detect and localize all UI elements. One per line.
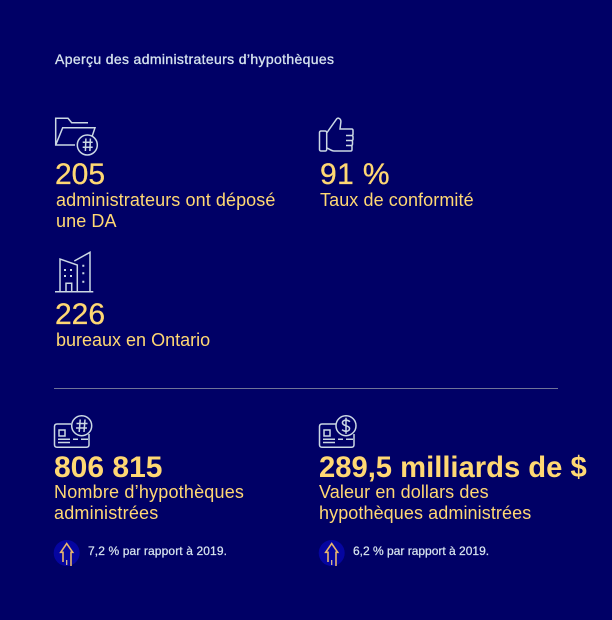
label: administrators: une DA bbox=[56, 211, 117, 231]
icon: thumbs up bbox=[318, 117, 354, 152]
label: dollar value bbox=[319, 482, 531, 523]
stat: 289,5 milliards de $: 289,5 milliards de $ bbox=[319, 452, 587, 484]
title: Aperçu des administrateurs d’hypothèques bbox=[55, 51, 334, 67]
label: dollar value: Valeur en dollars des bbox=[319, 482, 489, 502]
label: compliance: Taux de conformité bbox=[320, 190, 474, 210]
label: number of mortgages: Nombre d’hypothèques bbox=[54, 482, 244, 502]
label: administrators bbox=[56, 190, 275, 231]
label: dollar value: hypothèques administrées bbox=[319, 503, 531, 523]
label: number of mortgages bbox=[54, 482, 244, 523]
stat: 205: 205 bbox=[55, 158, 105, 191]
icon: card with hash bbox=[54, 415, 92, 448]
note: 6,2 %: 6,2 % par rapport à 2019. bbox=[353, 544, 489, 558]
icon: up arrow left bbox=[54, 540, 80, 566]
stat: 806 815: 806 815 bbox=[54, 451, 162, 484]
note: 7,2 %: 7,2 % par rapport à 2019. bbox=[88, 544, 227, 558]
label: offices: bureaux en Ontario bbox=[56, 330, 210, 350]
icon: folder with hash bbox=[54, 118, 98, 156]
icon: up arrow right bbox=[318, 540, 345, 566]
icon: buildings bbox=[55, 251, 94, 292]
label: number of mortgages: administrées bbox=[54, 503, 158, 523]
stat: 226: 226 bbox=[55, 298, 105, 331]
icon: card with dollar bbox=[318, 415, 357, 448]
stat: 91 %: 91 % bbox=[320, 158, 390, 191]
divider bbox=[54, 388, 558, 389]
label: administrators: administrateurs ont déposé bbox=[56, 190, 275, 210]
